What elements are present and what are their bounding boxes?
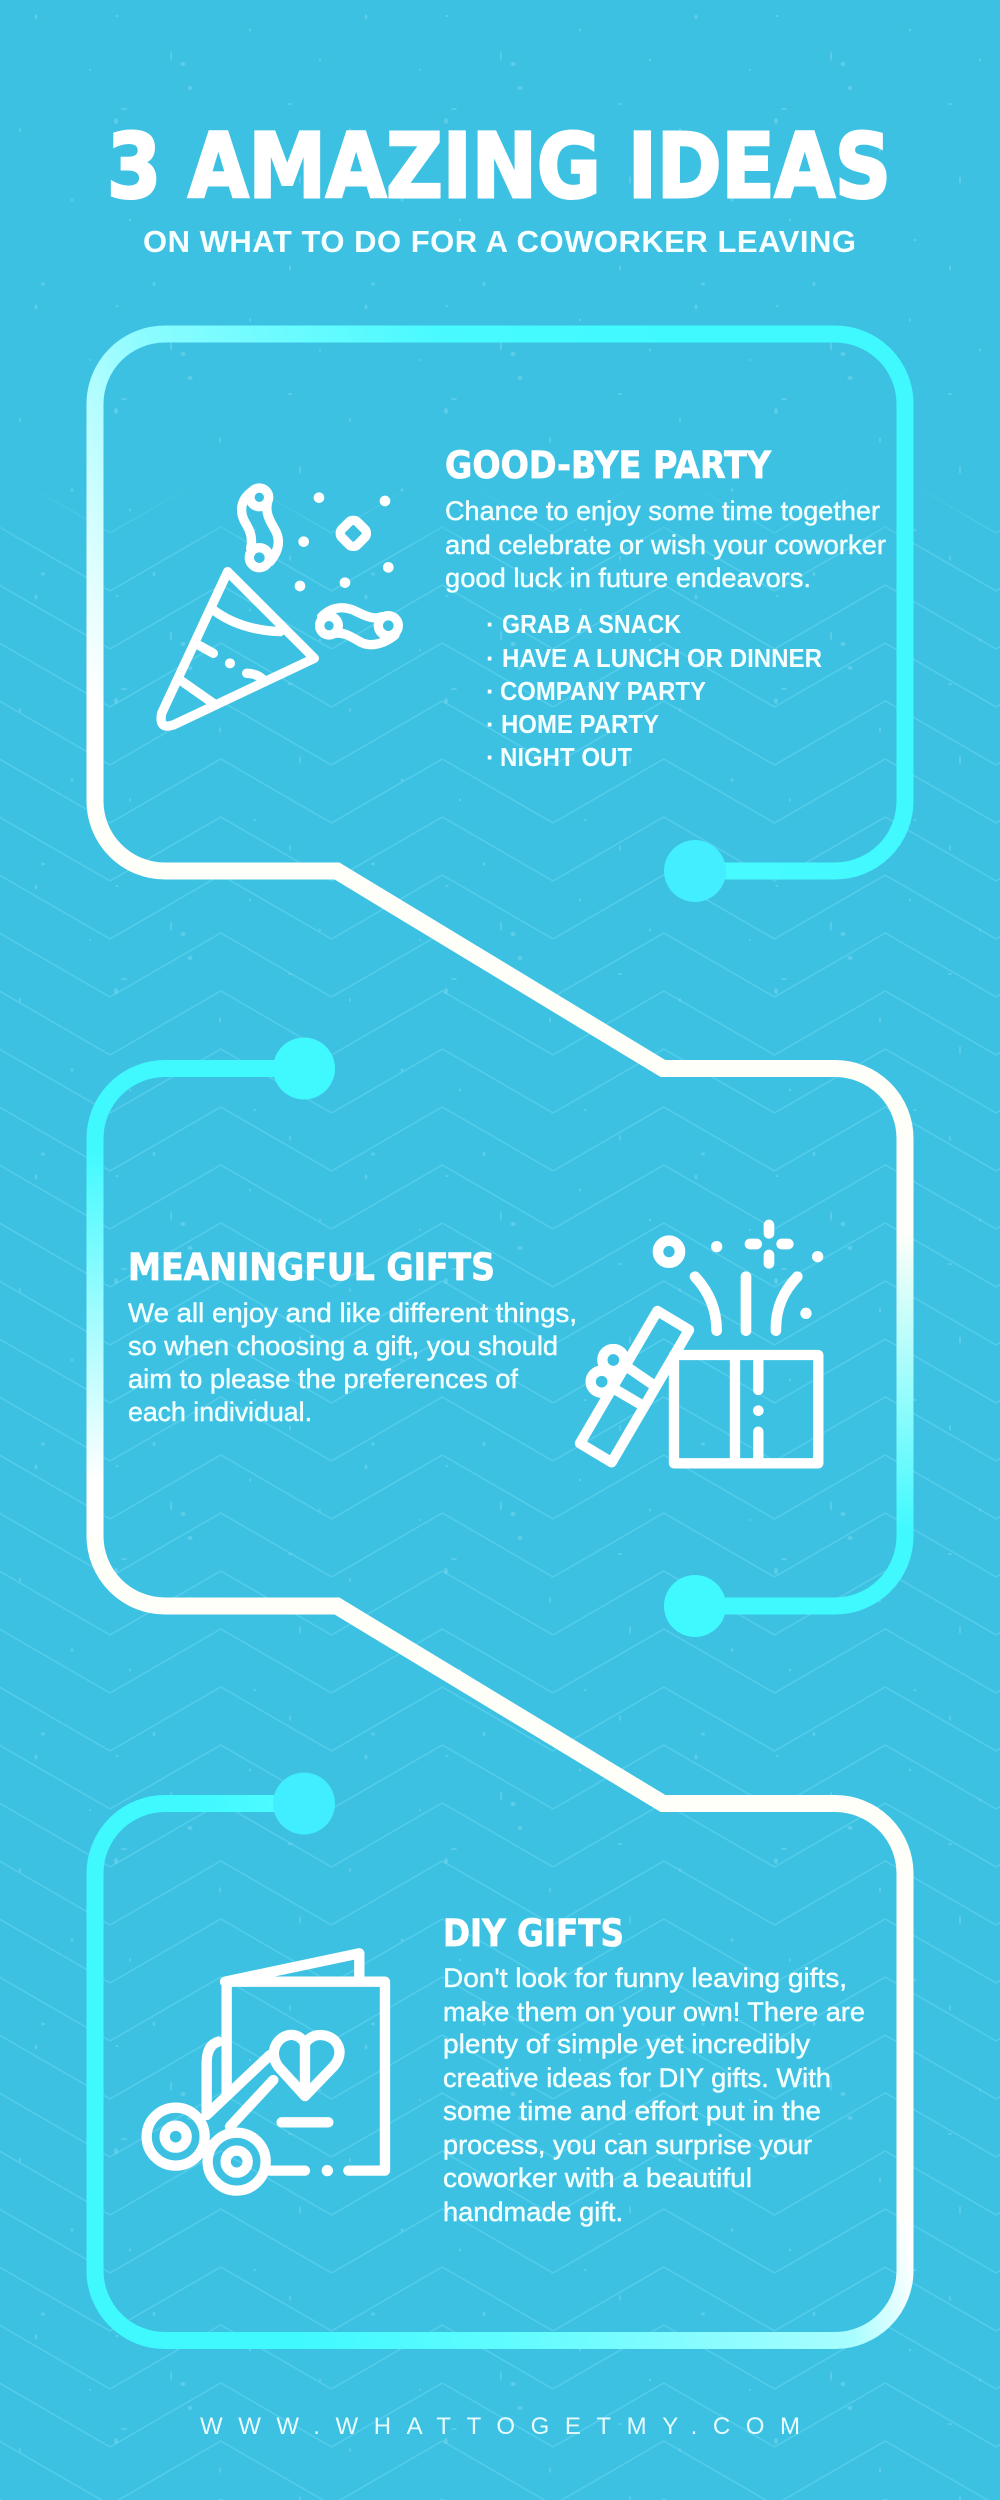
text block: gifts description: so when choosing a gift, you should [128, 1331, 558, 1361]
list: party ideas [486, 609, 822, 772]
text block: diy description: coworker with a beautiful [443, 2163, 752, 2193]
text block: gifts description: each individual. [128, 1397, 312, 1427]
list: party ideas: · [486, 643, 495, 673]
subtitle: ON WHAT TO DO FOR A COWORKER LEAVING [143, 224, 856, 259]
text block: diy description [443, 1963, 865, 2227]
heading: meaningful gifts: MEANINGFUL GIFTS [128, 1246, 495, 1289]
icon: open gift box [580, 1225, 823, 1463]
text block: diy description: process, you can surprise your [443, 2130, 812, 2160]
list: party ideas: GRAB A SNACK [502, 609, 681, 639]
icon: party popper [161, 488, 398, 726]
text block: party description: Chance to enjoy some time together [445, 496, 880, 526]
connector line: third box outline with dot [95, 1772, 905, 2340]
list: party ideas: · [486, 676, 495, 706]
footer url: WWW.WHATTOGETMY.COM [200, 2413, 800, 2440]
list: party ideas: NIGHT OUT [500, 742, 632, 772]
text block: party description: good luck in future endeavors. [445, 563, 811, 593]
title: 3 AMAZING IDEAS [107, 114, 891, 218]
text block: gifts description: aim to please the preferences of [128, 1364, 518, 1394]
text block: gifts description [128, 1298, 577, 1427]
list: party ideas: HOME PARTY [501, 709, 659, 739]
text block: diy description: Don't look for funny leaving gifts, [443, 1963, 847, 1993]
text block: party description: and celebrate or wish your coworker [445, 530, 886, 560]
list: party ideas: HAVE A LUNCH OR DINNER [502, 643, 822, 673]
text block: diy description: some time and effort put in the [443, 2096, 821, 2126]
text block: party description [445, 496, 886, 593]
text block: diy description: plenty of simple yet incredibly [443, 2029, 811, 2059]
list: party ideas: · [486, 742, 495, 772]
icon: card with scissors [147, 1953, 385, 2191]
text block: gifts description: We all enjoy and like different things, [128, 1298, 577, 1328]
list: party ideas: COMPANY PARTY [500, 676, 706, 706]
text block: diy description: handmade gift. [443, 2197, 623, 2227]
text block: diy description: make them on your own! There are [443, 1997, 865, 2027]
connector line: second box right side with dot [664, 1230, 905, 1637]
text block: diy description: creative ideas for DIY gifts. With [443, 2063, 831, 2093]
list: party ideas: · [486, 709, 495, 739]
connector line: second to third box [95, 1536, 905, 2222]
heading: diy gifts: DIY GIFTS [443, 1912, 624, 1955]
connector line: first box outline with dot [95, 334, 905, 902]
panel: meaningful gifts [128, 1225, 823, 1463]
connector line: second box left side with dot [95, 1038, 335, 1538]
list: party ideas: · [486, 609, 495, 639]
panel: diy gifts [147, 1912, 865, 2227]
heading: good-bye party: GOOD-BYE PARTY [445, 444, 772, 487]
connector line: first to second box [95, 800, 905, 1232]
panel: good-bye party [161, 444, 886, 772]
